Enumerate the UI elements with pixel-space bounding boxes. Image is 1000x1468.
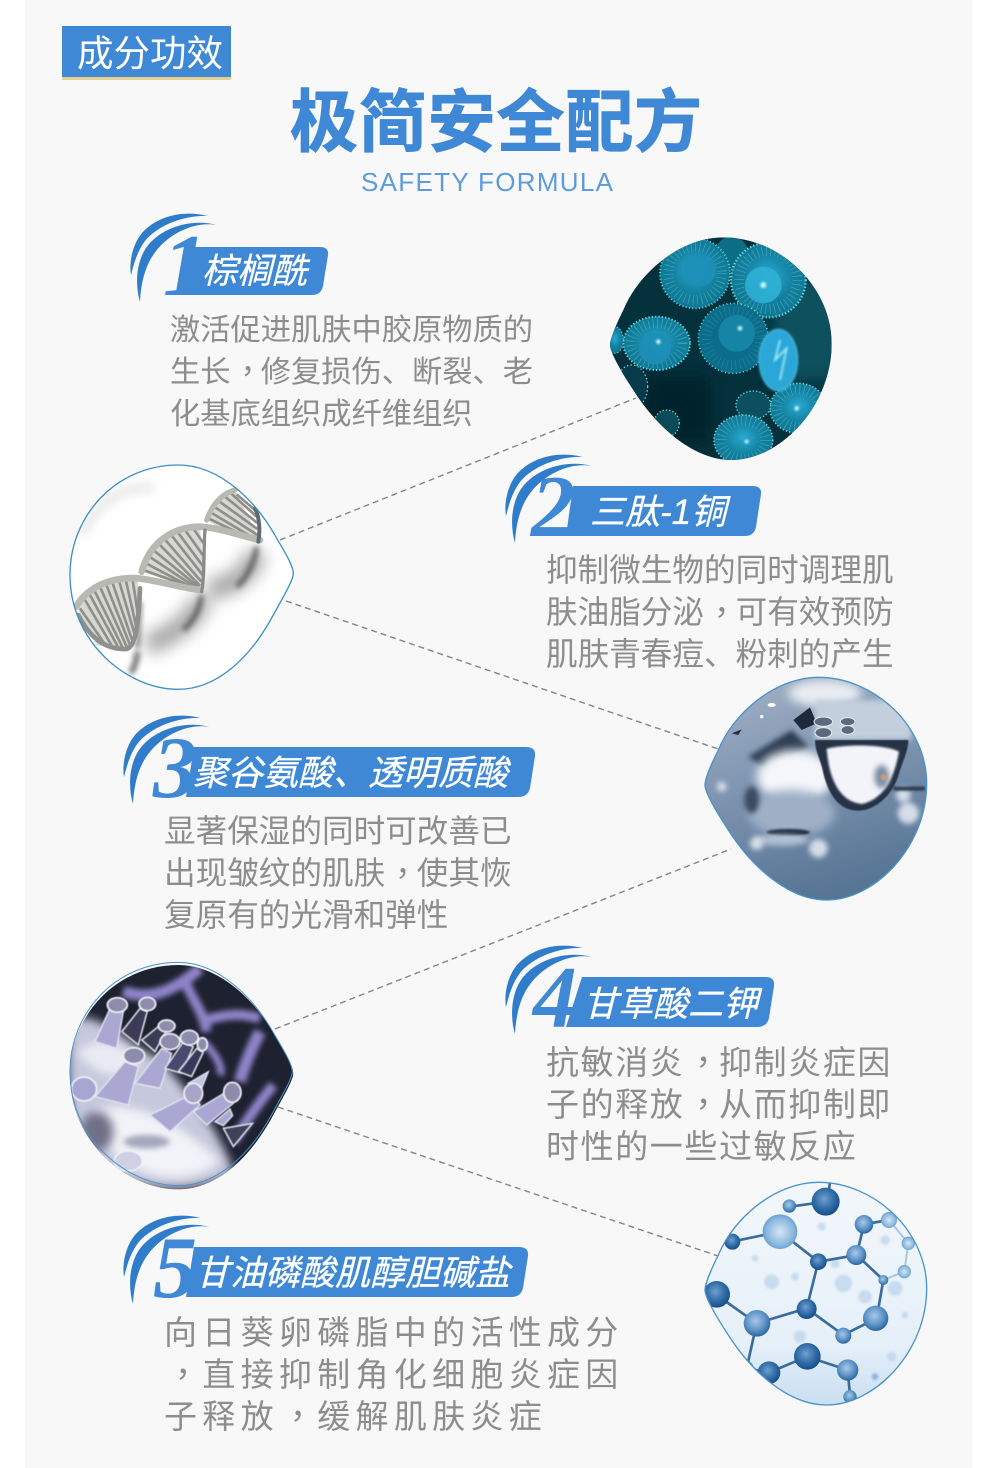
label text 1: 棕榈酰 [202, 252, 311, 291]
description 5: 直接抑制角化细胞炎症因 [202, 1356, 624, 1393]
label text 3: 聚谷氨酸、透明质酸 [193, 754, 512, 793]
label text 4: 甘草酸二钾 [583, 985, 763, 1024]
description 3: ， [395, 846, 427, 882]
label bar 5 [186, 1247, 528, 1297]
description 4: ， [695, 1034, 730, 1071]
description 3: 使其恢 [417, 855, 512, 891]
description 4: 从而抑制即 [719, 1086, 892, 1123]
ingredient 1 [130, 214, 533, 431]
outline: virus blob [70, 962, 292, 1186]
icon: arcs 1 [130, 214, 217, 302]
image: virus [70, 962, 294, 1190]
description 2: ， [714, 585, 746, 621]
description 5: 子释放 [164, 1398, 279, 1435]
ingredient 2 [505, 455, 894, 672]
description 1: 化基底组织成纤维组织 [170, 397, 473, 431]
description 3: 显著保湿的同时可改善已 [164, 813, 512, 849]
description 3: 复原有的光滑和弹性 [164, 897, 448, 933]
image: water droplet [704, 676, 928, 901]
ingredient 3 [123, 716, 535, 933]
outline: DNA blob [70, 465, 293, 689]
description 3 [164, 813, 512, 933]
label bar 1 [180, 247, 328, 295]
description 1: ， [241, 347, 271, 380]
description 5: 缓解肌肤炎症 [317, 1398, 547, 1435]
number 5: 5 [153, 1220, 197, 1317]
description 4: 时性的一些过敏反应 [546, 1128, 857, 1165]
description 2: 肤油脂分泌 [546, 594, 704, 630]
outline: molecule blob [705, 1182, 927, 1405]
label text 2: 三肽-1铜 [590, 493, 731, 532]
icon: arcs 2 [505, 455, 592, 543]
image: jellyfish [610, 237, 832, 460]
label bar 2 [566, 486, 761, 536]
description 5: 向日葵卵磷脂中的活性成分 [164, 1314, 624, 1351]
description 2: 抑制微生物的同时调理肌 [546, 552, 894, 588]
number 3: 3 [152, 720, 197, 817]
description 4: 抑制炎症因 [719, 1044, 892, 1081]
description 2: 肌肤青春痘、粉刺的产生 [546, 636, 894, 672]
section tag: 成分功效 [77, 33, 223, 74]
section tag [62, 26, 231, 80]
ingredient 5 [123, 1216, 624, 1435]
description 4: 抗敏消炎 [546, 1044, 684, 1081]
description 1: 生长 [170, 356, 231, 389]
description 5 [164, 1314, 624, 1435]
description 1 [170, 313, 533, 431]
title: 极简安全配方 [290, 85, 703, 161]
label bar 4 [566, 977, 774, 1027]
icon: arcs 4 [505, 946, 592, 1034]
ingredient 4 [505, 946, 892, 1165]
number 1: 1 [163, 218, 207, 315]
icon: arcs 5 [123, 1216, 210, 1304]
number 4: 4 [531, 950, 577, 1047]
image: DNA helix [69, 464, 294, 690]
subtitle: SAFETY FORMULA [361, 167, 614, 197]
description 2: 可有效预防 [736, 594, 894, 630]
label text 5: 甘油磷酸肌醇胆碱盐 [195, 1254, 513, 1293]
connector lines [275, 398, 731, 1256]
description 3: 出现皱纹的肌肤 [164, 855, 385, 891]
description 2 [546, 552, 894, 672]
description 5: ， [175, 1346, 213, 1383]
description 4: ， [695, 1076, 730, 1113]
image: molecules [704, 1182, 928, 1406]
description 1: 激活促进肌肤中胶原物质的 [170, 313, 533, 347]
description 4 [546, 1034, 892, 1165]
description 4: 子的释放 [546, 1086, 684, 1123]
description 1: 修复损伤、断裂、老 [261, 355, 533, 389]
icon: arcs 3 [123, 716, 210, 804]
outline: droplet blob [705, 677, 927, 900]
number 2: 2 [529, 459, 575, 556]
description 5: ， [290, 1388, 328, 1425]
label bar 3 [186, 747, 535, 797]
